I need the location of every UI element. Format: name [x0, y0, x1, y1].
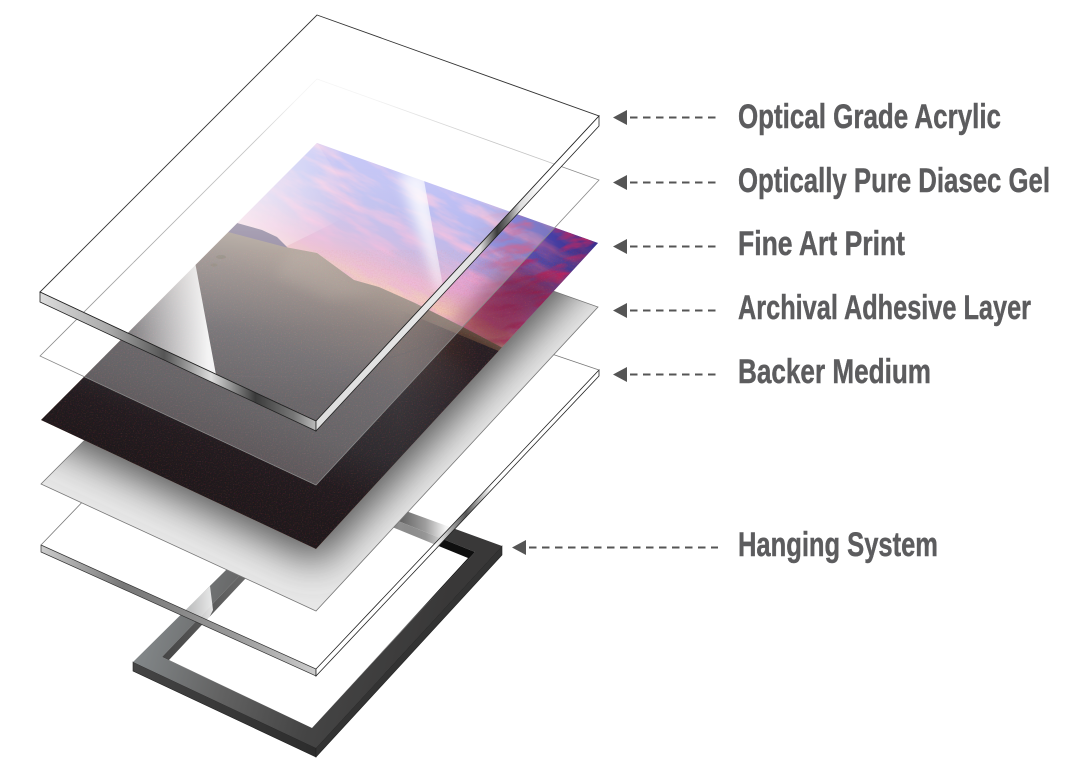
label: hanging system: Hanging System — [738, 526, 938, 564]
arrow: fine art print — [613, 239, 718, 254]
sky light beam — [398, 172, 446, 292]
label: fine art print: Fine Art Print — [738, 225, 905, 263]
brown foot of dune on the right — [446, 323, 503, 371]
pale sky along upper-left edge — [238, 148, 320, 246]
arrow: adhesive layer — [613, 303, 718, 318]
distant mountain — [228, 223, 288, 248]
arrow: backer medium — [613, 367, 718, 382]
arrow: diasec gel — [613, 175, 718, 190]
label: optical grade acrylic: Optical Grade Acrylic — [738, 98, 1001, 136]
backer glare over left frame bar — [183, 586, 213, 620]
dune ripple line — [230, 340, 440, 377]
arrow: hanging system — [512, 540, 718, 555]
hanging system frame — [133, 479, 502, 757]
archival adhesive layer — [40, 291, 599, 612]
desert shrubs — [210, 255, 226, 267]
dune and ground — [41, 232, 502, 549]
acrylic front-right edge — [316, 116, 599, 431]
sand grain — [30, 250, 610, 560]
label: backer medium: Backer Medium — [738, 353, 931, 391]
backer glare over right frame bar — [394, 512, 450, 544]
lit dune face — [302, 278, 340, 292]
optical grade acrylic — [40, 15, 599, 431]
fine art print photo — [41, 143, 598, 549]
backer medium — [41, 350, 599, 676]
sky — [41, 143, 598, 549]
acrylic front-left edge — [40, 292, 316, 431]
arrow: optical grade acrylic — [613, 110, 718, 125]
maroon horizon glow — [450, 265, 565, 352]
lower-left glare — [128, 262, 216, 374]
optically pure diasec gel — [40, 79, 599, 485]
shaded right side — [416, 319, 498, 436]
